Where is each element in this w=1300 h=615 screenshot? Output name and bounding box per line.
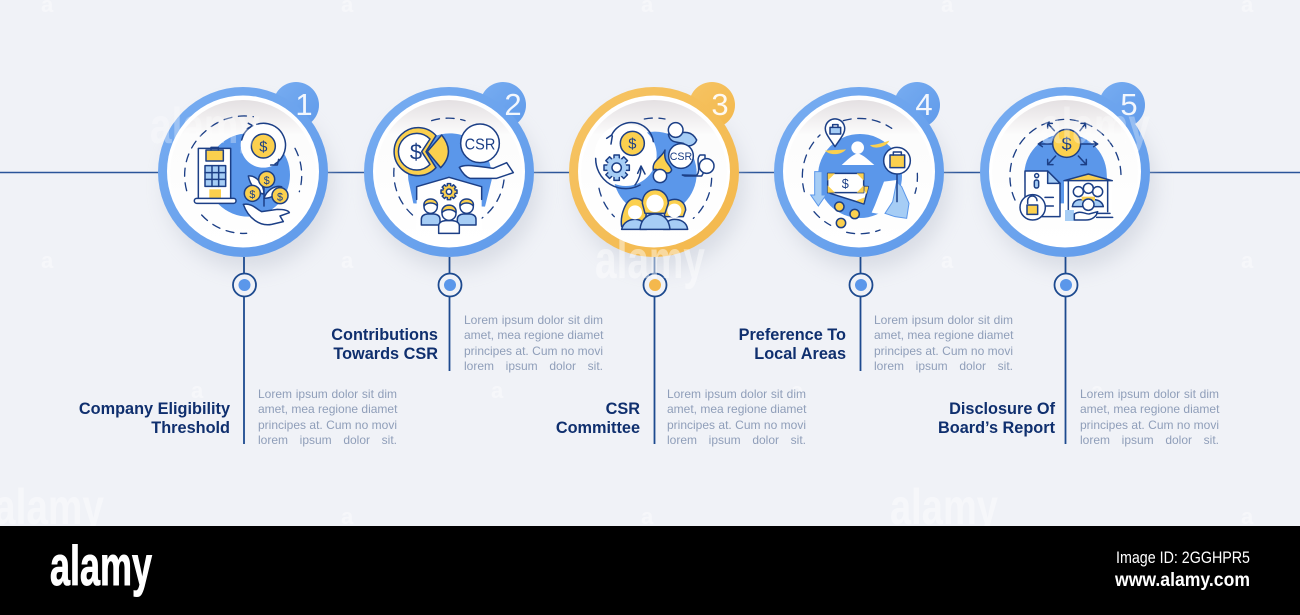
heading: step 3: Committee — [556, 419, 640, 437]
node 1 — [233, 274, 256, 296]
horizontal timeline — [0, 172, 1300, 174]
text block: step 5: Lorem ipsum dolor sit dim — [1080, 387, 1219, 401]
text block: step 4: lorem ipsum dolor sit. — [874, 359, 1013, 373]
footer logo: alamy — [50, 534, 152, 597]
text block: step 1: amet, mea regione diamet — [258, 402, 397, 416]
text block: step 1: principes at. Cum no movi — [258, 418, 397, 432]
icon: building and growing money: $ — [259, 139, 267, 155]
text block: step 3: principes at. Cum no movi — [667, 418, 806, 432]
text block: step 4: amet, mea regione diamet — [874, 328, 1013, 342]
text block: step 1: lorem ipsum dolor sit. — [258, 433, 397, 447]
icon: CSR contributions and team — [394, 118, 513, 233]
watermark: alamy logos: a — [191, 378, 204, 403]
icon: CSR contributions and team: $ — [410, 139, 422, 164]
watermark: alamy logos: a — [1091, 378, 1104, 403]
text block: step 3 — [667, 387, 806, 447]
watermark: alamy logos: a — [341, 504, 354, 529]
heading: step 1: Threshold — [151, 419, 230, 437]
text block: step 4: principes at. Cum no movi — [874, 344, 1013, 358]
watermark: alamy logos: a — [941, 248, 954, 273]
watermark: alamy logos: a — [1241, 504, 1254, 529]
panel: step 1 medallion — [158, 82, 333, 444]
number 1: 1 — [295, 87, 313, 122]
watermark: alamy logos: alamy — [890, 479, 998, 535]
panel: step 5 medallion — [980, 82, 1155, 444]
panel: step 3 medallion — [569, 82, 744, 444]
heading: step 4: Local Areas — [754, 345, 846, 363]
heading: step 1: Company Eligibility — [79, 400, 230, 418]
icon: CSR committee: $ — [628, 137, 636, 153]
icon: disclosure of board report — [1010, 119, 1121, 221]
text block: step 3: lorem ipsum dolor sit. — [667, 433, 806, 447]
watermark: alamy logos: alamy — [1040, 98, 1150, 154]
text block: step 2: lorem ipsum dolor sit. — [464, 359, 603, 373]
panel: step 2 medallion — [364, 82, 539, 371]
heading: step 4: Preference To — [739, 326, 846, 344]
icon: preference to local areas — [802, 118, 917, 234]
watermark: alamy logos: alamy — [150, 98, 260, 154]
text block: step 2 — [464, 313, 604, 373]
text block: step 5: principes at. Cum no movi — [1080, 418, 1219, 432]
text block: step 5 — [1080, 387, 1220, 447]
number 3: 3 — [711, 87, 729, 122]
heading: step 2: Towards CSR — [333, 345, 438, 363]
watermark: alamy logos: alamy — [595, 230, 705, 290]
icon: building and growing money: $ — [264, 175, 270, 187]
panel: step 4 medallion — [774, 82, 949, 371]
icon: preference to local areas: $ — [842, 177, 849, 191]
number 2: 2 — [504, 87, 522, 122]
watermark: alamy logos: a — [1241, 248, 1254, 273]
icon: building and growing money: $ — [277, 191, 283, 203]
heading: step 1 — [79, 400, 230, 437]
footer bar — [0, 526, 1300, 615]
node 2 — [438, 274, 462, 296]
text block: step 4: Lorem ipsum dolor sit dim — [874, 313, 1013, 327]
image id: Image ID: 2GGHPR5 — [1116, 548, 1250, 567]
icon: disclosure of board report: $ — [1062, 134, 1072, 154]
text block: step 1 — [258, 387, 398, 447]
watermark: alamy logos: a — [341, 248, 354, 273]
icon: CSR committee: CSR — [670, 151, 693, 163]
heading: step 3 — [556, 400, 640, 437]
heading: step 3: CSR — [606, 400, 640, 418]
text block: step 2: amet, mea regione diamet — [464, 328, 603, 342]
watermark: alamy logos: a — [41, 248, 54, 273]
number 4: 4 — [915, 87, 933, 122]
heading: step 5: Disclosure Of — [949, 400, 1055, 418]
heading: step 2 — [331, 326, 438, 363]
text block: step 3: Lorem ipsum dolor sit dim — [667, 387, 806, 401]
heading: step 5 — [938, 400, 1056, 437]
node 5 — [1054, 274, 1078, 296]
heading: step 5: Board’s Report — [938, 419, 1055, 437]
watermark: alamy logos: a — [641, 504, 654, 529]
heading: step 4 — [739, 326, 846, 363]
text block: step 5: amet, mea regione diamet — [1080, 402, 1219, 416]
website: www.alamy.com — [1114, 570, 1250, 591]
watermark: alamy logos: a — [791, 378, 804, 403]
text block: step 5: lorem ipsum dolor sit. — [1080, 433, 1219, 447]
number 5: 5 — [1120, 87, 1138, 122]
watermark: alamy logos: a — [491, 378, 504, 403]
icon: CSR committee — [595, 118, 714, 229]
text block: step 2: principes at. Cum no movi — [464, 344, 603, 358]
icon: CSR contributions and team: CSR — [465, 136, 495, 153]
text block: step 1: Lorem ipsum dolor sit dim — [258, 387, 397, 401]
node 3 — [644, 274, 666, 296]
icon: building and growing money: $ — [249, 189, 255, 201]
heading: step 2: Contributions — [331, 326, 438, 344]
node 4 — [850, 274, 872, 296]
text block: step 4 — [874, 313, 1014, 373]
text block: step 2: Lorem ipsum dolor sit dim — [464, 313, 603, 327]
icon: building and growing money — [185, 116, 302, 233]
text block: step 3: amet, mea regione diamet — [667, 402, 806, 416]
